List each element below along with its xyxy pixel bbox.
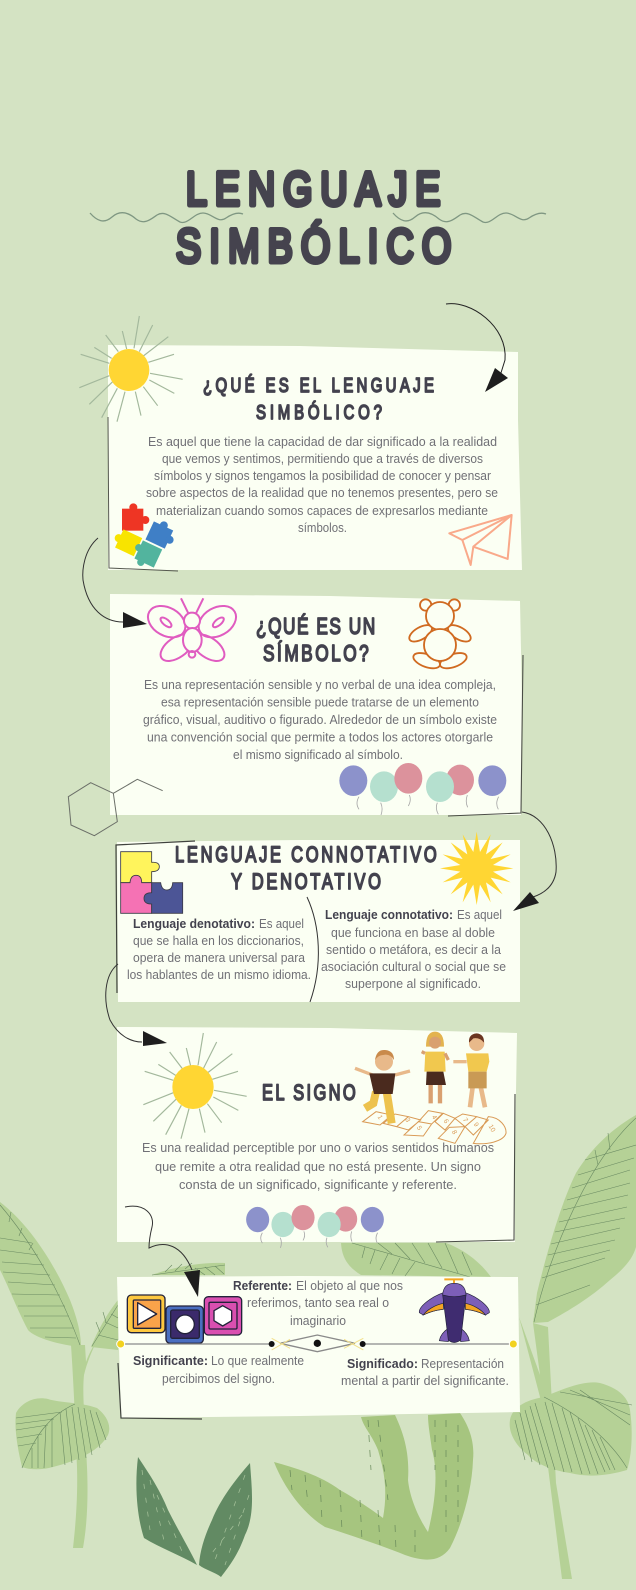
body text 2: Es una representación sensible y no verbal de una idea compleja, xyxy=(144,678,496,692)
body text 4: Es una realidad perceptible por uno o varios sentidos humanos xyxy=(142,1141,494,1155)
puzzle piece: red xyxy=(122,503,149,531)
heading 2: ¿QUÉ ES UN xyxy=(256,614,375,640)
heading 3: Y DENOTATIVO xyxy=(231,870,381,895)
panel border 4 xyxy=(436,1094,515,1242)
body text 1: sobre aspectos de la realidad que no tenemos presentes, pero se xyxy=(146,486,498,500)
arrow: panel 2 to panel 3 xyxy=(513,812,556,911)
puzzle piece: blue xyxy=(145,517,179,551)
arrow: panel 3 to panel 4 xyxy=(106,964,167,1046)
text: denotativo: los hablantes de un mismo idioma. xyxy=(127,968,311,982)
illustration: hopscotch: 5 xyxy=(415,1125,423,1132)
icon: three-piece puzzle xyxy=(121,852,183,913)
panel: el signo xyxy=(117,1027,517,1248)
text: connotativo: superpone al significado. xyxy=(345,977,481,991)
icon: balloons xyxy=(339,763,506,815)
body text 1: símbolos. xyxy=(298,521,347,535)
wavy line: title left xyxy=(90,213,243,222)
child: boy pointing xyxy=(453,1033,489,1107)
panel border 2 xyxy=(448,655,523,816)
illustration: hopscotch: 10 xyxy=(487,1123,497,1134)
text: connotativo: asociación cultural o social que se xyxy=(321,960,506,974)
heading 2 xyxy=(256,614,375,667)
icon: butterfly xyxy=(142,598,242,666)
panel border 3 xyxy=(116,841,195,993)
icon: yellow star sun xyxy=(440,832,513,905)
child: running boy xyxy=(355,1050,410,1123)
text: connotativo xyxy=(321,908,506,991)
icon: sun with rays xyxy=(79,316,183,422)
text: denotativo xyxy=(127,917,311,982)
illustration: hopscotch: 7 xyxy=(461,1117,469,1124)
panel: que es un simbolo xyxy=(68,594,523,836)
panel: lenguaje connotativo y denotativo xyxy=(116,832,520,1002)
body text 1: que vemos y sentimos, permitiendo que a través de diversos xyxy=(162,452,483,466)
text: significante: percibimos del signo. xyxy=(162,1372,275,1386)
heading 3 xyxy=(175,843,437,895)
arrow: panel 1 to panel 2 xyxy=(83,538,147,628)
body text 4 xyxy=(142,1141,494,1192)
text: connotativo: que funciona en base al doble xyxy=(331,926,495,940)
icon: balloons 2 xyxy=(246,1205,384,1248)
arrow: title to panel 1 xyxy=(446,304,508,392)
illustration: hopscotch xyxy=(363,1111,506,1144)
panel background 4 xyxy=(117,1027,517,1242)
text: significado: mental a partir del significante. xyxy=(341,1374,509,1388)
body text 4: consta de un significado, significante y referente. xyxy=(179,1178,457,1192)
curved divider xyxy=(307,897,318,1002)
heading 2: SÍMBOLO? xyxy=(263,641,369,667)
body text 2: esa representación sensible puede tratarse de un elemento xyxy=(161,696,479,710)
body text 2 xyxy=(143,678,497,762)
panel border 5 xyxy=(118,1363,202,1419)
block: pink with hexagon xyxy=(204,1297,242,1335)
botanical background illustration xyxy=(0,1115,636,1579)
plant: right stem and leaves xyxy=(510,1115,636,1579)
icon: teddy bear xyxy=(407,599,473,671)
illustration: hopscotch: 1 xyxy=(376,1114,384,1121)
text: significado xyxy=(341,1357,509,1388)
text: referente: referimos, tanto sea real o xyxy=(247,1296,389,1310)
title xyxy=(176,163,451,273)
body text 2: gráfico, visual, auditivo o figurado. Alrededor de un símbolo existe xyxy=(143,713,497,727)
illustration: hopscotch: 6 xyxy=(442,1118,450,1125)
text: significante: Lo que realmente xyxy=(211,1354,304,1368)
panel background 1 xyxy=(108,345,522,570)
heading 1: SIMBÓLICO? xyxy=(256,400,382,424)
text: significado: Significado: xyxy=(347,1357,418,1371)
timeline connector xyxy=(117,1335,517,1352)
puzzle piece: yellow xyxy=(111,527,142,556)
text: denotativo: Es aquel xyxy=(259,917,304,931)
panel border 1 xyxy=(108,417,178,571)
body text 2: una convención social que permite a todos los actores otorgarle xyxy=(147,730,493,744)
text: referente: imaginario xyxy=(290,1314,346,1328)
heading 4: EL SIGNO xyxy=(262,1081,356,1106)
arrow: panel 4 to panel 5 xyxy=(125,1206,200,1297)
body text 2: el mismo significado al símbolo. xyxy=(233,748,403,762)
body text 1: materializan cuando somos capaces de expresarlos mediante xyxy=(156,504,488,518)
panel background 2 xyxy=(110,594,522,815)
text: referente: Referente: xyxy=(233,1279,292,1293)
text: referente xyxy=(233,1279,403,1328)
heading 1: ¿QUÉ ES EL LENGUAJE xyxy=(203,374,434,397)
child: girl xyxy=(422,1032,448,1103)
illustration: hopscotch: 9 xyxy=(472,1121,480,1128)
icon: paper plane xyxy=(449,515,512,565)
heading 3: LENGUAJE CONNOTATIVO xyxy=(175,843,437,868)
panel background 3 xyxy=(117,840,520,1002)
plant: left stem and leaves xyxy=(0,1202,225,1548)
text: denotativo: Lenguaje denotativo: xyxy=(133,917,255,931)
icon: colourful puzzle xyxy=(111,503,179,571)
text: denotativo: que se halla en los diccionarios, xyxy=(133,934,304,948)
plant: medium green centre xyxy=(274,1413,473,1560)
text: denotativo: opera de manera universal para xyxy=(133,951,305,965)
wavy line: title right xyxy=(393,213,546,222)
text: significado: Representación xyxy=(421,1357,504,1371)
text: significante: Significante: xyxy=(133,1354,208,1368)
panel background 5 xyxy=(117,1276,520,1418)
panel: significante, significado, referente xyxy=(117,1276,520,1419)
icon: toy blocks xyxy=(127,1295,242,1343)
block: orange with triangle xyxy=(127,1295,165,1333)
icon: toy plane xyxy=(419,1279,489,1342)
heading 1 xyxy=(203,374,434,424)
text: referente: El objeto al que nos xyxy=(296,1279,403,1293)
block: blue with circle xyxy=(166,1306,203,1343)
puzzle piece: teal xyxy=(129,539,162,571)
text: connotativo: Lenguaje connotativo: xyxy=(325,908,453,922)
text: significante xyxy=(133,1354,304,1386)
illustration: hopscotch: 3 xyxy=(403,1117,411,1124)
text: connotativo: sentido o metáfora, es decir a la xyxy=(326,943,501,957)
illustration: children playing xyxy=(355,1032,489,1123)
illustration: hopscotch: 4 xyxy=(430,1114,438,1121)
body text 1 xyxy=(146,435,498,535)
title: SIMBÓLICO xyxy=(176,220,451,273)
illustration: hopscotch: 8 xyxy=(450,1129,458,1136)
panel: que es el lenguaje simbolico xyxy=(79,316,522,571)
body text 1: símbolos y signos tengamos la posibilidad de conocer y pensar xyxy=(154,469,491,483)
body text 4: que remite a otra realidad que no está presente. Un signo xyxy=(155,1160,481,1174)
text: connotativo: Es aquel xyxy=(457,908,502,922)
leaf: middle behind panels xyxy=(341,1243,491,1277)
plant: dark leaves bottom xyxy=(136,1457,252,1577)
body text 1: Es aquel que tiene la capacidad de dar significado a la realidad xyxy=(148,435,497,449)
icon: sun with rays 2 xyxy=(143,1033,247,1139)
title: LENGUAJE xyxy=(186,163,440,216)
icon: hexagon molecule xyxy=(68,779,163,836)
